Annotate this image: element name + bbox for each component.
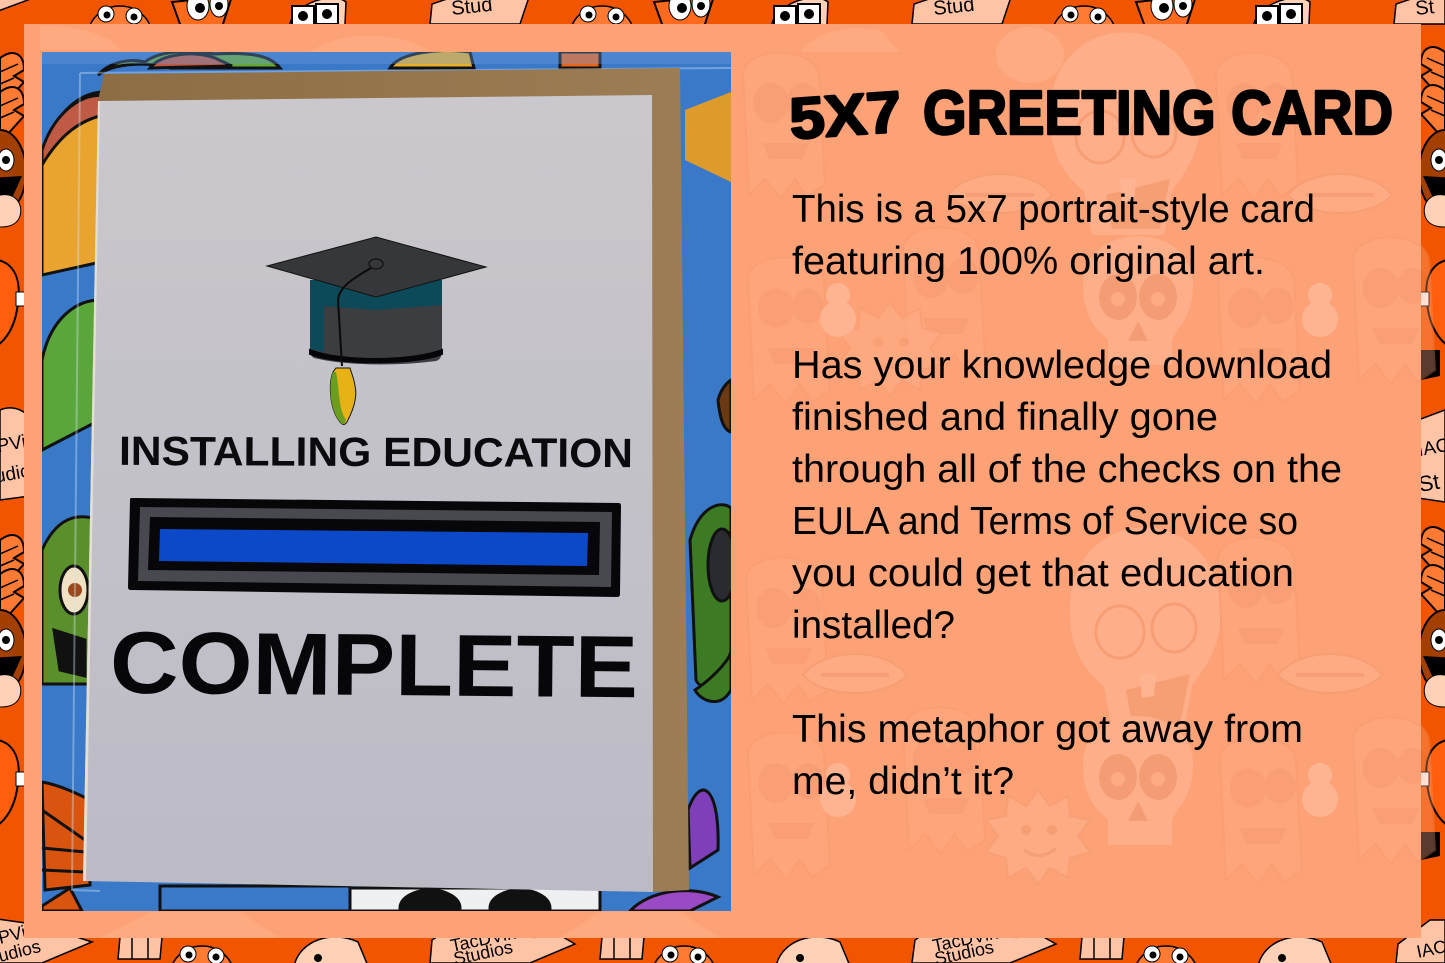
- paragraph two: through all of the checks on the: [792, 448, 1342, 491]
- paragraph one: featuring 100% original art.: [792, 240, 1265, 283]
- title: [787, 79, 1393, 152]
- paragraph two: finished and finally gone: [792, 396, 1218, 439]
- right border cartoons: [1416, 47, 1445, 860]
- top border cartoons: [0, 0, 1445, 66]
- progress bar: [128, 498, 621, 597]
- photo of greeting card: [42, 51, 736, 926]
- title: GREETING CARD: [923, 79, 1393, 148]
- card text: installing education: INSTALLING EDUCATION: [119, 428, 633, 476]
- title: 5X7: [787, 79, 904, 152]
- paragraph two: EULA and Terms of Service so: [792, 500, 1298, 543]
- right border cartoons: St: [1417, 469, 1441, 497]
- paragraph two: [792, 344, 1342, 647]
- left border cartoons: [0, 53, 38, 832]
- white greeting card: [83, 95, 653, 892]
- card text: complete: COMPLETE: [110, 613, 638, 716]
- plastic sleeve outline: [72, 68, 731, 891]
- body text: [792, 188, 1342, 803]
- photo background: blue printed art: [42, 52, 731, 911]
- paragraph three: This metaphor got away from: [792, 708, 1303, 751]
- kraft envelope: [98, 68, 689, 892]
- bottom border cartoons: TacDViking: [931, 918, 1023, 956]
- paragraph one: This is a 5x7 portrait-style card: [792, 188, 1315, 231]
- printed art: cartoon characters behind the card: [42, 51, 736, 926]
- paragraph two: installed?: [792, 604, 955, 647]
- paragraph two: you could get that education: [792, 552, 1294, 595]
- tassel: [330, 368, 356, 424]
- bottom border cartoons: TacDViking: [449, 918, 541, 956]
- graduation cap icon: [267, 237, 486, 424]
- paragraph three: me, didn’t it?: [792, 760, 1014, 803]
- paragraph one: [792, 188, 1315, 283]
- paragraph three: [792, 708, 1303, 803]
- bottom border cartoons: [0, 916, 1445, 963]
- paragraph two: Has your knowledge download: [792, 344, 1332, 387]
- progress fill: [159, 529, 588, 566]
